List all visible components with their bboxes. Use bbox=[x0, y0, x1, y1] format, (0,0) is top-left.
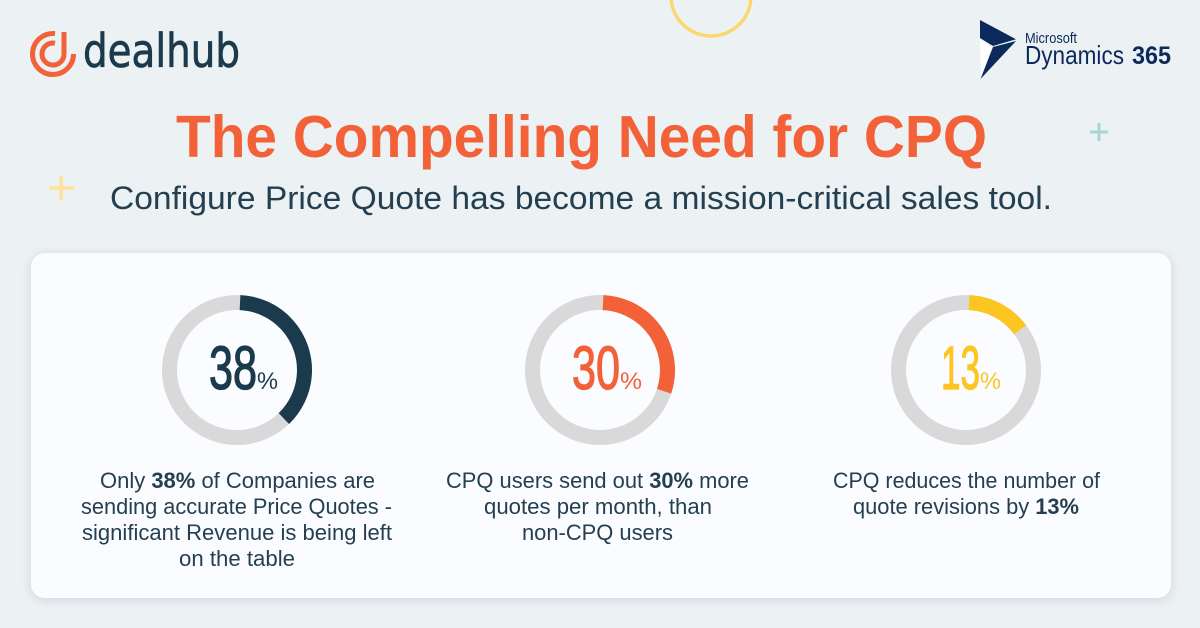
value: 38%: 38 bbox=[209, 334, 257, 402]
subtitle: Configure Price Quote has become a mission-critical sales tool. bbox=[110, 180, 1052, 216]
description: 38%: sending accurate Price Quotes - bbox=[81, 494, 392, 519]
description: 38%: on the table bbox=[179, 546, 295, 571]
description: 30%: quotes per month, than bbox=[484, 494, 712, 519]
decoration: yellow ring bbox=[671, 0, 751, 36]
Dynamics wordmark: Dynamics bbox=[1025, 40, 1124, 70]
panel: stats card bbox=[31, 253, 1171, 598]
title: The Compelling Need for CPQ bbox=[176, 104, 987, 170]
description: 13% bbox=[833, 468, 1101, 519]
donut chart: 38% bbox=[166, 299, 308, 441]
icon: dealhub rings bbox=[32, 32, 74, 75]
stat: 30 percent bbox=[446, 299, 749, 545]
description: 38% bbox=[81, 468, 392, 571]
description: 13%: CPQ reduces the number of bbox=[833, 468, 1101, 493]
description: 30%: CPQ users send out 30% more bbox=[446, 468, 749, 493]
donut chart: 30% bbox=[529, 299, 671, 441]
description: 13%: quote revisions by 13% bbox=[853, 494, 1079, 519]
value: 13%: % bbox=[980, 368, 1001, 395]
value: 38%: % bbox=[257, 368, 278, 395]
Microsoft Dynamics 365 logo bbox=[980, 20, 1171, 79]
donut chart: 13% bbox=[895, 299, 1037, 441]
description: 38%: Only 38% of Companies are bbox=[100, 468, 375, 493]
value: 13%: 13 bbox=[941, 334, 980, 402]
decoration: yellow plus bbox=[49, 176, 74, 200]
value: 30%: % bbox=[620, 368, 642, 395]
Microsoft wordmark: Microsoft bbox=[1025, 30, 1078, 47]
decoration: teal plus bbox=[1090, 123, 1108, 141]
icon: dynamics triangle bbox=[980, 20, 1016, 79]
dealhub wordmark: dealhub bbox=[83, 24, 240, 78]
value: 30%: 30 bbox=[572, 334, 620, 402]
365 wordmark: 365 bbox=[1132, 42, 1171, 70]
stat: 38 percent bbox=[81, 299, 392, 571]
description: 30%: non-CPQ users bbox=[522, 520, 673, 545]
description: 38%: significant Revenue is being left bbox=[82, 520, 392, 545]
dealhub logo bbox=[32, 24, 240, 78]
description: 30% bbox=[446, 468, 749, 545]
stat: 13 percent bbox=[833, 299, 1101, 519]
